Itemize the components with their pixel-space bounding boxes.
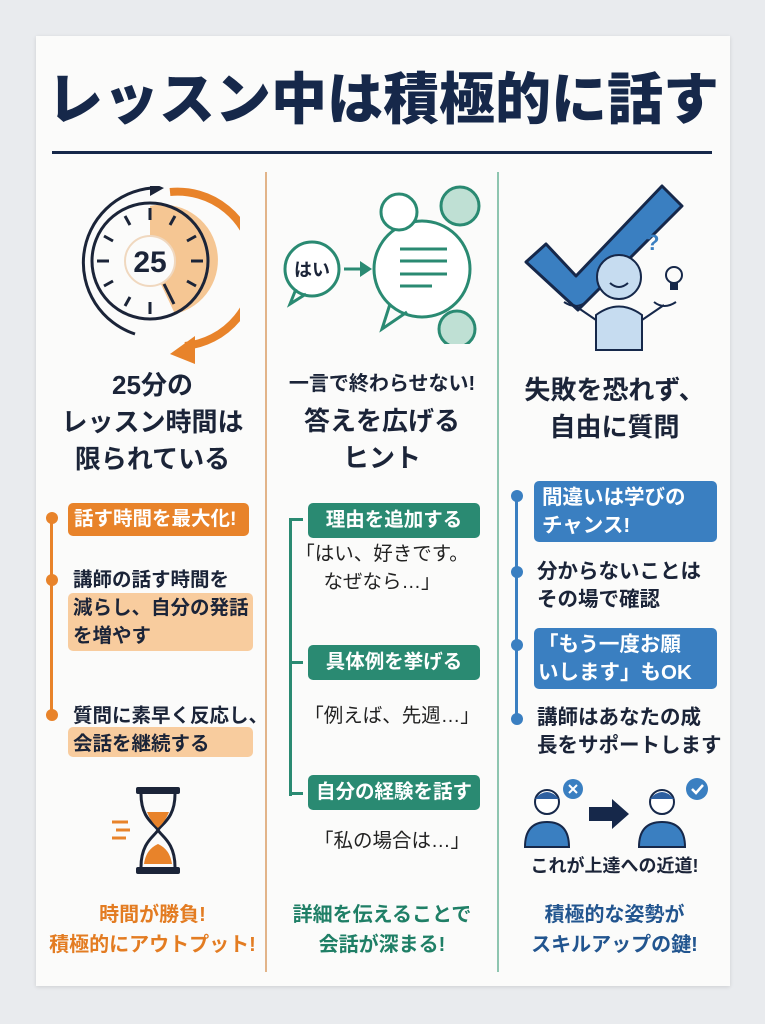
heading: レッスン時間は xyxy=(61,407,244,437)
item: respond quickly xyxy=(68,727,253,757)
item: support xyxy=(537,706,722,757)
item: maximize xyxy=(68,503,249,536)
heading: 失敗を恐れず、 xyxy=(524,375,705,405)
item: confirm: 分からないことは xyxy=(537,560,701,583)
item: ask again xyxy=(534,628,717,689)
footer: スキルアップの鍵! xyxy=(531,934,698,956)
item: mistakes: 間違いは学びの xyxy=(542,486,686,509)
caption: これが上達への近道! xyxy=(530,856,698,876)
item: support: 講師はあなたの成 xyxy=(537,706,701,729)
icon: speech bubbles xyxy=(284,186,480,344)
icon: clock: 25 xyxy=(133,246,167,279)
icon: clock xyxy=(82,186,240,364)
heading: 25分の xyxy=(112,370,193,400)
panel: hints: 「はい、好きです。 xyxy=(295,543,469,565)
item: experience xyxy=(308,775,480,810)
item: ask again: いします」もOK xyxy=(538,661,692,684)
item: support: 長をサポートします xyxy=(537,734,722,757)
icon: checkmark person xyxy=(524,184,684,351)
footer xyxy=(531,904,698,956)
heading: 一言で終わらせない! xyxy=(289,373,475,395)
item: reduce teacher time xyxy=(68,593,253,651)
panel: questions xyxy=(511,184,722,956)
item: reason xyxy=(308,503,480,538)
panel: time: 会話を継続する xyxy=(73,733,210,755)
heading xyxy=(61,370,244,474)
item: mistakes xyxy=(534,481,717,542)
item: example: 具体例を挙げる xyxy=(326,651,462,673)
title: レッスン中は積極的に話す xyxy=(47,68,719,131)
footer xyxy=(293,904,471,956)
footer xyxy=(49,904,256,956)
footer: 詳細を伝えることで xyxy=(293,904,471,926)
panel: hints: 答えを広げる xyxy=(304,406,460,436)
panel: hints: 「例えば、先週…」 xyxy=(304,705,480,727)
item: mistakes: チャンス! xyxy=(542,514,630,537)
icon: checkmark person: ? xyxy=(646,230,659,255)
item: experience: 自分の経験を話す xyxy=(316,781,472,803)
icon: before after xyxy=(524,778,708,848)
footer: 積極的にアウトプット! xyxy=(49,934,256,956)
panel: time: を増やす xyxy=(73,625,151,647)
panel: time: 質問に素早く反応し、 xyxy=(73,705,268,727)
footer: 時間が勝負! xyxy=(99,904,206,926)
item: ask again: 「もう一度お願 xyxy=(538,633,681,656)
icon: speech bubbles: はい xyxy=(294,260,330,280)
item: maximize: 話す時間を最大化! xyxy=(74,508,236,530)
panel: hints xyxy=(284,186,480,956)
heading: 限られている xyxy=(75,444,230,474)
item: example xyxy=(308,645,480,680)
panel: hints: なぜなら…」 xyxy=(323,571,440,593)
footer: 会話が深まる! xyxy=(319,934,445,956)
item: confirm xyxy=(537,560,701,611)
footer: 積極的な姿勢が xyxy=(544,904,684,926)
panel: time xyxy=(46,186,268,956)
icon: hourglass xyxy=(112,787,180,874)
panel: hints: ヒント xyxy=(343,443,421,473)
panel: time: 講師の話す時間を xyxy=(73,569,229,591)
panel: hints: 「私の場合は…」 xyxy=(314,830,470,852)
heading xyxy=(524,375,705,442)
item: reason: 理由を追加する xyxy=(326,509,462,531)
item: confirm: その場で確認 xyxy=(537,588,660,611)
heading: 自由に質問 xyxy=(549,412,680,442)
panel: time: 減らし、自分の発話 xyxy=(73,597,249,619)
